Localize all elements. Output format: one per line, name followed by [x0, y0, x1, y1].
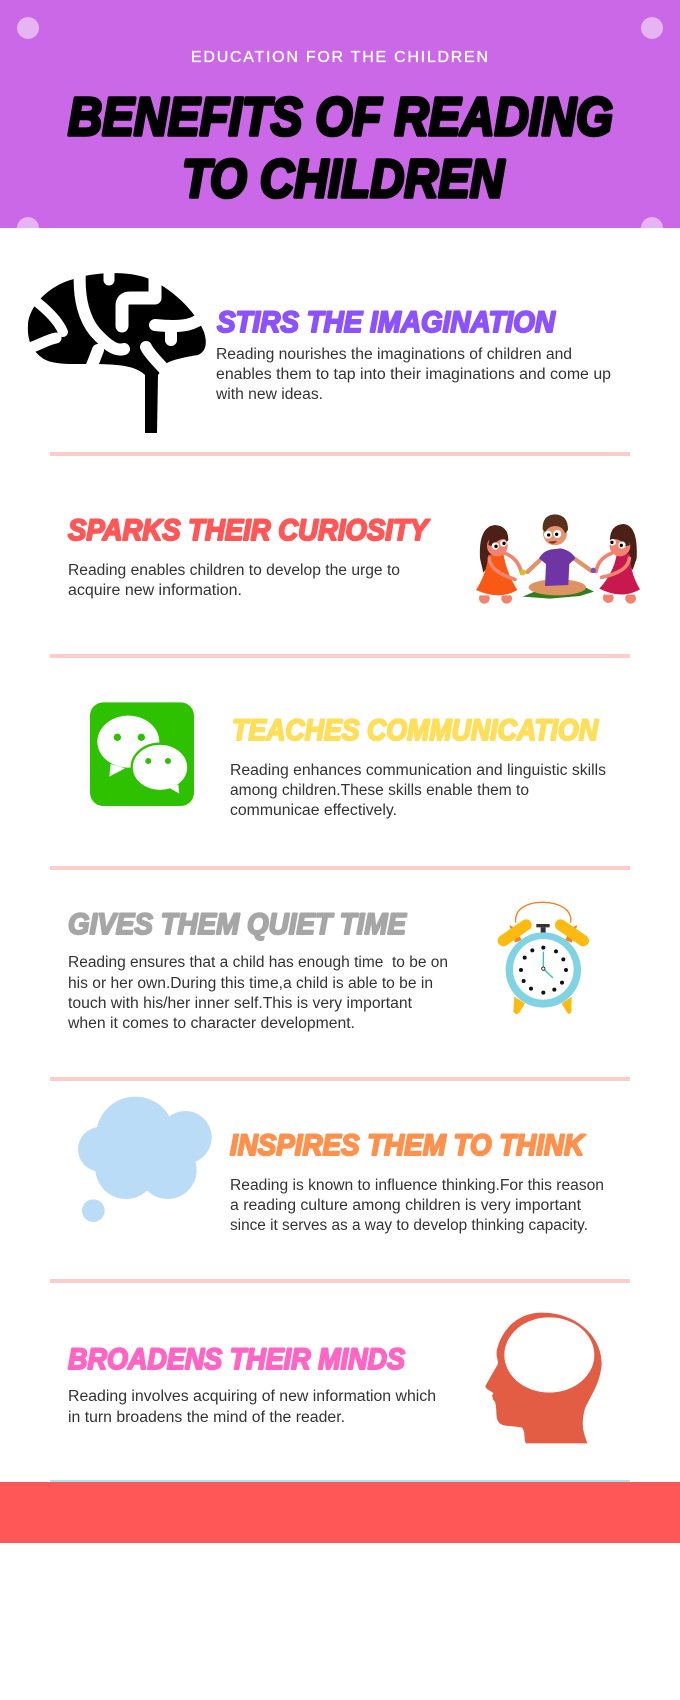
body text: Reading enables children to develop the urge to [68, 562, 400, 579]
body text: Reading nourishes the imaginations of children and [216, 346, 572, 363]
icon: brain tree [22, 266, 208, 433]
title [68, 87, 613, 209]
body text [68, 1388, 436, 1426]
panel: inspires them to think [78, 1097, 604, 1234]
icon: green chat app [90, 702, 194, 806]
body text: communicae effectively. [230, 802, 397, 819]
body text: when it comes to character development. [67, 1015, 355, 1032]
icon: three children holding hands [476, 514, 640, 604]
body text: Reading involves acquiring of new information which [68, 1388, 436, 1405]
heading: TEACHES COMMUNICATION [232, 714, 599, 747]
heading: BROADENS THEIR MINDS [68, 1343, 405, 1376]
body text [215, 346, 611, 403]
body text: among children.These skills enable them to [230, 782, 529, 799]
body text: since it serves as a way to develop thinking capacity. [230, 1217, 588, 1234]
body text: with new ideas. [215, 386, 323, 403]
girl right [591, 524, 640, 604]
body text: his or her own.During this time,a child is able to be in [68, 975, 433, 992]
title: BENEFITS OF READING [68, 87, 613, 147]
girl left [476, 525, 526, 604]
body text: acquire new information. [68, 582, 242, 599]
icon: alarm clock [503, 902, 583, 1014]
body text [230, 762, 606, 819]
body text: enables them to tap into their imaginations and come up [216, 366, 611, 383]
body text: Reading is known to influence thinking.For this reason [230, 1177, 604, 1194]
panel: sparks their curiosity [68, 514, 640, 604]
body text [67, 954, 448, 1032]
subtitle: EDUCATION FOR THE CHILDREN [191, 49, 488, 66]
icon: thought cloud [78, 1097, 212, 1222]
body text: touch with his/her inner self.This is very important [68, 995, 413, 1012]
heading: SPARKS THEIR CURIOSITY [68, 514, 430, 547]
panel: stirs the imagination [22, 266, 611, 433]
body text [68, 562, 400, 599]
body text: in turn broadens the mind of the reader. [68, 1409, 345, 1426]
panel: teaches communication [90, 702, 606, 819]
boy [527, 514, 592, 595]
heading: INSPIRES THEM TO THINK [230, 1129, 587, 1162]
body text: Reading ensures that a child has enough time to be on [68, 954, 448, 971]
icon: head silhouette [485, 1313, 602, 1443]
body text [230, 1177, 604, 1234]
body text: Reading enhances communication and linguistic skills [230, 762, 606, 779]
body text: a reading culture among children is very important [230, 1197, 582, 1214]
decorative corner dots [17, 17, 663, 228]
heading: GIVES THEM QUIET TIME [68, 908, 407, 941]
footer band [0, 1482, 680, 1543]
panel: gives them quiet time [67, 902, 583, 1032]
title: TO CHILDREN [182, 149, 505, 209]
panel: broadens their minds [68, 1313, 602, 1443]
heading: STIRS THE IMAGINATION [217, 306, 556, 339]
panel: header banner [0, 0, 680, 228]
